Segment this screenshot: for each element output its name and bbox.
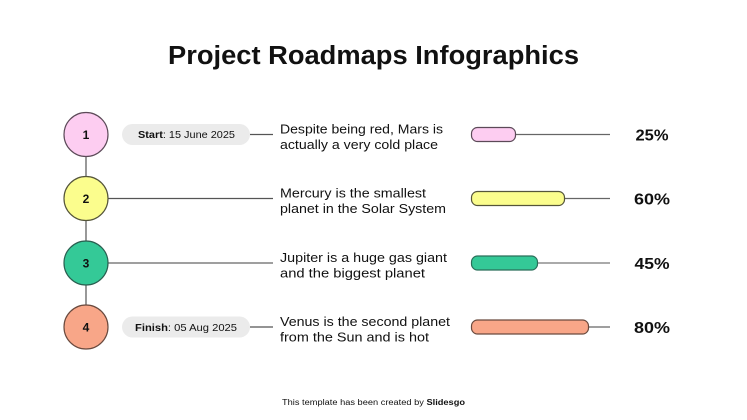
row 3 xyxy=(64,241,670,285)
progress bar 80% xyxy=(472,320,588,334)
finish date pill xyxy=(122,316,250,338)
description 1: Despite being red, Mars is xyxy=(280,122,443,136)
step 1 circle xyxy=(64,112,108,156)
description 1: actually a very cold place xyxy=(280,138,438,152)
step 3 circle: 3 xyxy=(83,256,90,270)
description 2: Mercury is the smallest xyxy=(280,186,427,200)
description 3: and the biggest planet xyxy=(280,266,426,280)
step 2 circle xyxy=(64,176,108,220)
step 3 circle xyxy=(64,241,108,285)
step 1 circle: 1 xyxy=(83,128,90,142)
progress bar 45% xyxy=(472,256,538,270)
step 4 circle xyxy=(64,305,108,349)
row 1 xyxy=(64,112,668,156)
start date pill: Start: 15 June 2025 xyxy=(138,129,235,141)
row 4 xyxy=(64,305,670,349)
description 4: Venus is the second planet xyxy=(280,315,451,329)
description 3: Jupiter is a huge gas giant xyxy=(280,251,448,265)
value 60%: 60% xyxy=(634,192,670,208)
progress bar 25% xyxy=(472,128,516,142)
description 4: from the Sun and is hot xyxy=(280,330,430,344)
row 2 xyxy=(64,176,670,220)
start date pill xyxy=(122,124,250,145)
step 2 circle: 2 xyxy=(83,192,90,206)
step 4 circle: 4 xyxy=(83,320,90,334)
progress bar 60% xyxy=(472,192,564,206)
description 2: planet in the Solar System xyxy=(280,202,446,216)
finish date pill: Finish: 05 Aug 2025 xyxy=(135,322,237,334)
title: Project Roadmaps Infographics xyxy=(168,42,579,70)
value 80%: 80% xyxy=(634,320,670,337)
value 45%: 45% xyxy=(634,256,670,273)
footer credit: This template has been created by Slidesgo xyxy=(282,398,465,407)
value 25%: 25% xyxy=(636,128,668,144)
